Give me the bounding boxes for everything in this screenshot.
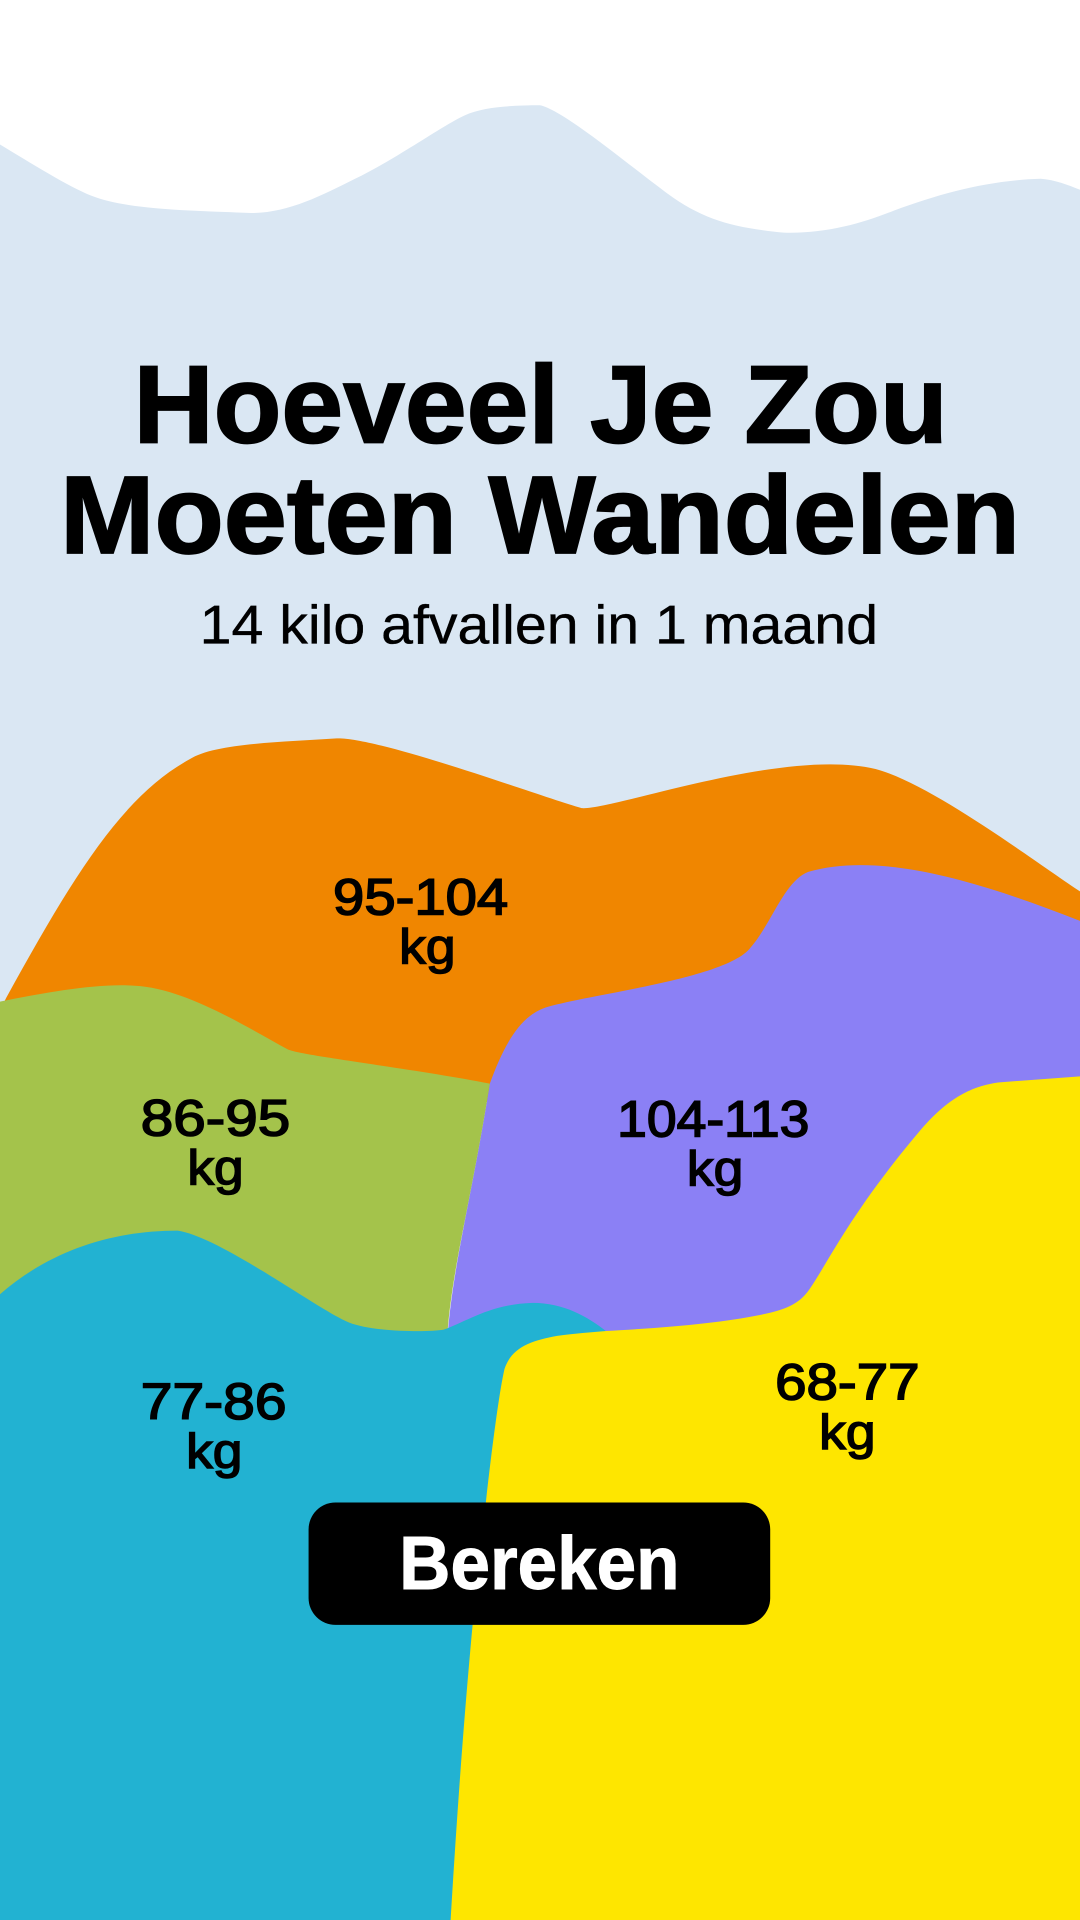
region: teal 77-86 kg [0,1231,607,1920]
label: 77-86 kg: kg [186,1425,242,1479]
label: 68-77 kg: kg [819,1406,876,1460]
label: 104-113 kg [617,1089,809,1196]
label: 86-95 kg: 86-95 [141,1089,290,1147]
background sky hill [0,105,1080,1224]
region: orange 95-104 kg [0,738,1080,1102]
button: Bereken: Bereken [399,1521,680,1605]
region: yellow 68-77 kg [451,1076,1080,1920]
label: 95-104 kg: kg [399,921,456,975]
label: 95-104 kg [333,868,508,975]
title [60,344,1020,577]
label: 86-95 kg: kg [187,1142,244,1196]
title line 2: Moeten Wandelen [60,454,1020,577]
region: green 86-95 kg [0,985,490,1341]
label: 104-113 kg: 104-113 [617,1089,809,1147]
subtitle: 14 kilo afvallen in 1 maand [200,593,878,655]
region: purple 104-113 kg [447,865,1080,1347]
label: 104-113 kg: kg [687,1142,743,1196]
label: 77-86 kg: 77-86 [141,1372,287,1430]
title line 1: Hoeveel Je Zou [133,344,948,467]
label: 86-95 kg [141,1089,290,1196]
label: 68-77 kg: 68-77 [775,1353,920,1411]
label: 68-77 kg [775,1353,920,1460]
label: 77-86 kg [141,1372,287,1479]
button: Bereken [309,1502,770,1625]
label: 95-104 kg: 95-104 [333,868,508,926]
